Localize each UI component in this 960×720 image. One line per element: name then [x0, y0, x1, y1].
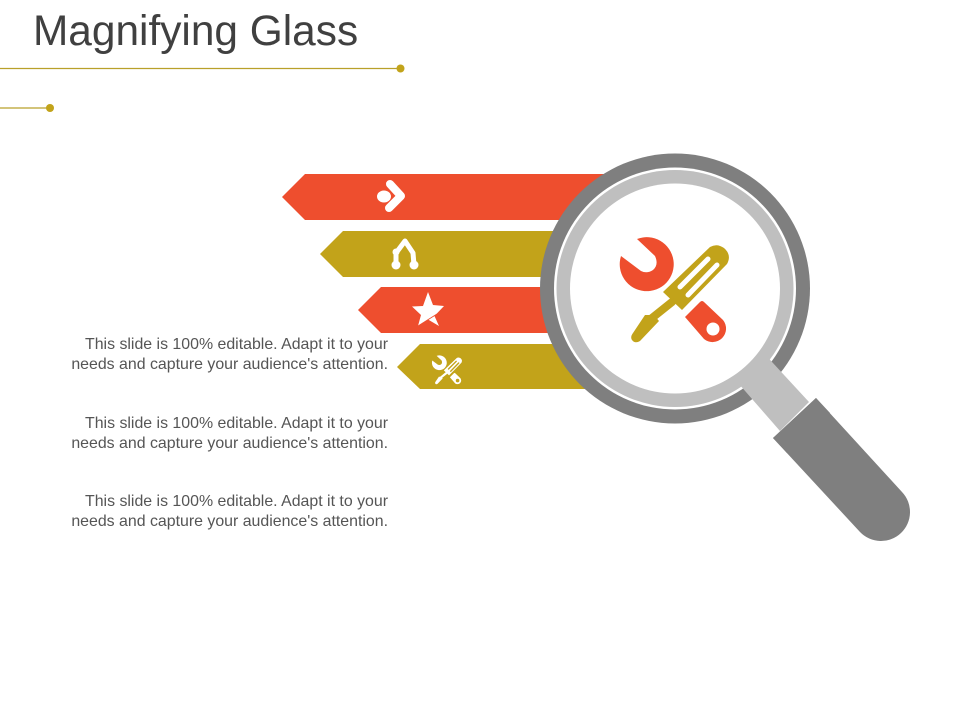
arrow banner 1	[282, 174, 640, 220]
outer grey ring	[540, 154, 810, 424]
icon: arrow right	[377, 184, 401, 208]
text block 2	[71, 415, 388, 452]
arrow banner 4	[397, 344, 640, 389]
arrow banner 2	[320, 231, 640, 277]
text block 3	[71, 493, 388, 530]
handle	[773, 398, 910, 541]
title: Magnifying Glass	[33, 7, 358, 54]
lens neck	[732, 349, 809, 431]
text block 2: This slide is 100% editable. Adapt it to your	[85, 415, 388, 432]
inner light ring	[556, 170, 794, 407]
text block 1: needs and capture your audience's attention.	[71, 356, 388, 372]
icon: branching route	[392, 241, 418, 270]
icon: screwdriver	[631, 245, 729, 342]
text block 3: This slide is 100% editable. Adapt it to your	[85, 493, 388, 510]
lens	[570, 184, 780, 394]
text block 3: needs and capture your audience's attention.	[71, 512, 388, 530]
white gap ring	[554, 168, 796, 410]
icon: small tools	[432, 355, 462, 384]
text block 1	[71, 336, 388, 372]
arrow banner 3	[358, 287, 640, 333]
handle cap over neck	[773, 398, 830, 453]
text block 2: needs and capture your audience's attention.	[71, 434, 388, 452]
magnifying glass	[540, 154, 910, 541]
icon: wrench	[620, 237, 674, 291]
text block 1: This slide is 100% editable. Adapt it to your	[85, 336, 388, 353]
title rule short	[0, 104, 54, 112]
icon: star	[412, 292, 444, 326]
icon: screwdriver red grip	[685, 301, 726, 342]
title rule long	[0, 64, 404, 72]
